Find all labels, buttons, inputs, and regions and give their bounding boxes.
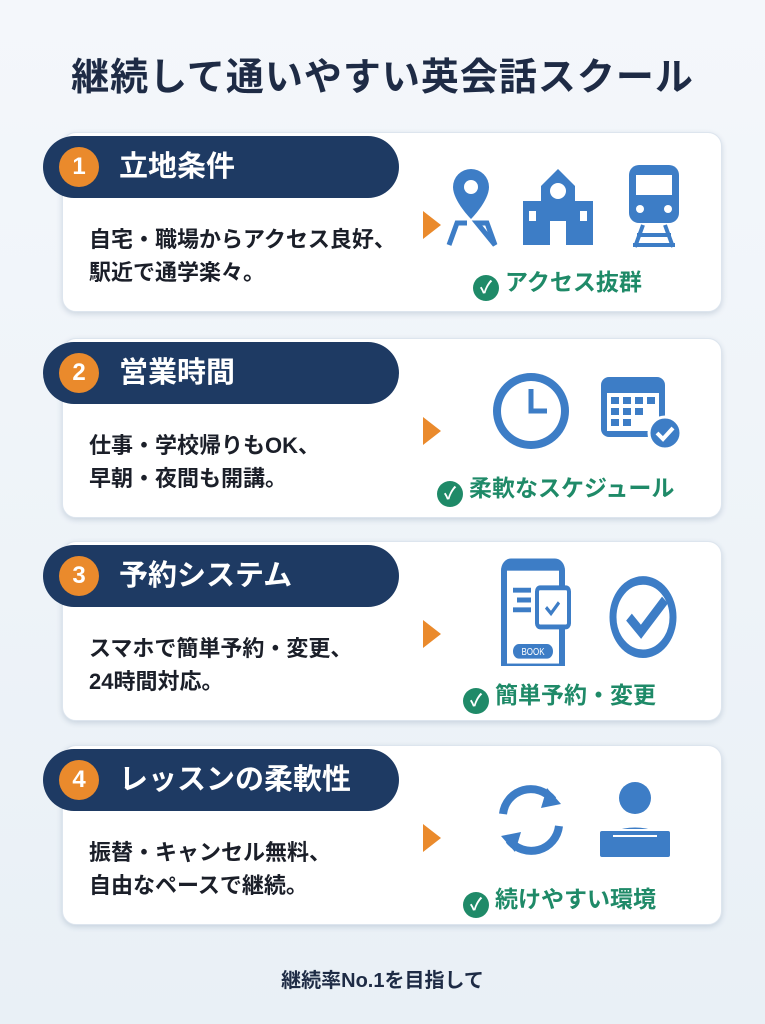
icons: clock calendar: [493, 373, 680, 449]
arrow: [423, 824, 441, 852]
heading pill 4: レッスンの柔軟性: [119, 764, 351, 796]
label: schedule: ✓: [444, 484, 456, 503]
title: 継続して通いやすい英会話スクール: [71, 57, 694, 99]
label: access: ✓: [480, 278, 492, 297]
text: hours: 早朝・夜間も開講。: [89, 466, 287, 491]
heading pill 2: 2: [72, 359, 86, 386]
label: access: [473, 269, 642, 301]
heading pill 2: 営業時間: [119, 357, 235, 389]
label: schedule: 柔軟なスケジュール: [469, 475, 674, 501]
text: flexibility: 自由なペースで継続。: [89, 873, 308, 898]
icons: phone check: BOOK: [521, 646, 545, 657]
panel: location: [62, 132, 722, 312]
heading pill 2: [43, 342, 399, 404]
text: location: [89, 227, 396, 285]
label: easy booking: [463, 682, 656, 714]
icons: phone check: [501, 558, 676, 666]
icons: refresh person: [499, 782, 670, 857]
text: booking: 24時間対応。: [89, 669, 223, 694]
label: easy booking: ✓: [470, 691, 482, 710]
heading pill 3: 予約システム: [119, 560, 292, 592]
heading pill 3: 3: [72, 562, 86, 589]
text: hours: [89, 433, 320, 491]
text: booking: [89, 636, 352, 694]
heading pill 1: 1: [72, 153, 86, 180]
panel: hours: [62, 338, 722, 518]
footer: 継続率No.1を目指して: [281, 970, 484, 992]
label: easy to continue: [463, 886, 656, 918]
icons: pin school train: [446, 165, 679, 248]
text: booking: スマホで簡単予約・変更、: [89, 636, 352, 661]
arrow: [423, 211, 441, 239]
text: flexibility: 振替・キャンセル無料、: [89, 840, 331, 865]
text: hours: 仕事・学校帰りもOK、: [89, 433, 320, 458]
label: easy to continue: 続けやすい環境: [495, 886, 656, 912]
panel: flexibility: [62, 745, 722, 925]
arrow: [423, 620, 441, 648]
label: easy booking: 簡単予約・変更: [495, 682, 656, 708]
text: location: 駅近で通学楽々。: [89, 260, 265, 285]
heading pill 1: [43, 136, 399, 198]
heading pill 4: 4: [72, 766, 86, 793]
label: easy to continue: ✓: [470, 895, 482, 914]
heading pill 4: [43, 749, 399, 811]
panel: booking: [62, 541, 722, 721]
text: location: 自宅・職場からアクセス良好、: [89, 227, 396, 252]
arrow: [423, 417, 441, 445]
label: access: アクセス抜群: [505, 269, 642, 295]
heading pill 1: 立地条件: [119, 151, 235, 183]
heading pill 3: [43, 545, 399, 607]
text: flexibility: [89, 840, 331, 898]
